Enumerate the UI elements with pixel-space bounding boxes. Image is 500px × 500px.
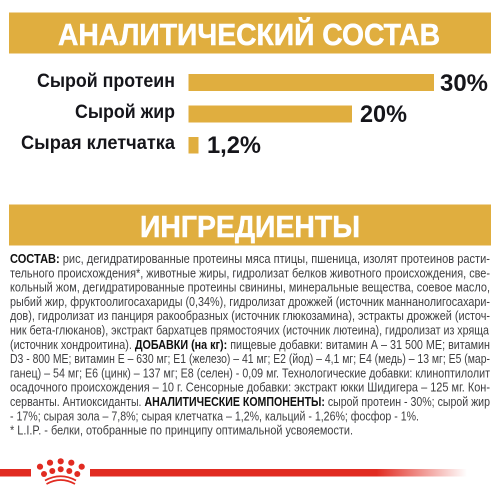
- row: crude fat: 20%: [360, 101, 407, 128]
- row: crude fat: Сырой жир: [75, 102, 175, 123]
- row: crude fat: [75, 101, 407, 128]
- bar chart: nutrient percentages: [21, 70, 488, 159]
- text block: ingredients list: [10, 251, 490, 438]
- panel: analytical composition: [9, 12, 491, 159]
- red band left: [0, 469, 31, 476]
- icon: crown logo: [37, 458, 85, 484]
- red band right with fade: [90, 469, 467, 476]
- text block: ingredients list: * L.I.P. - белки, отобранные по принципу оптимальной усвояемости.: [10, 423, 353, 438]
- row: crude protein: Сырой протеин: [37, 71, 175, 92]
- text block: ingredients list: - 17%; сырая зола – 7,8%; сырая клетчатка – 1,2%, кальций - 1,26%; фосфор - 1%.: [10, 408, 419, 423]
- row: crude fibre: Сырая клетчатка: [21, 133, 175, 154]
- heading banner: analytical composition: АНАЛИТИЧЕСКИЙ СОСТАВ: [58, 16, 440, 52]
- row: crude protein: [37, 70, 488, 97]
- row: crude fibre: [21, 132, 261, 159]
- panel: ingredients: [9, 204, 491, 438]
- row: crude fibre: 1,2%: [207, 132, 261, 159]
- footer: red band with crown logo: [0, 458, 467, 484]
- heading banner: ingredients: [9, 204, 491, 246]
- heading banner: ingredients: ИНГРЕДИЕНТЫ: [140, 209, 360, 244]
- row: crude protein: 30%: [440, 70, 488, 97]
